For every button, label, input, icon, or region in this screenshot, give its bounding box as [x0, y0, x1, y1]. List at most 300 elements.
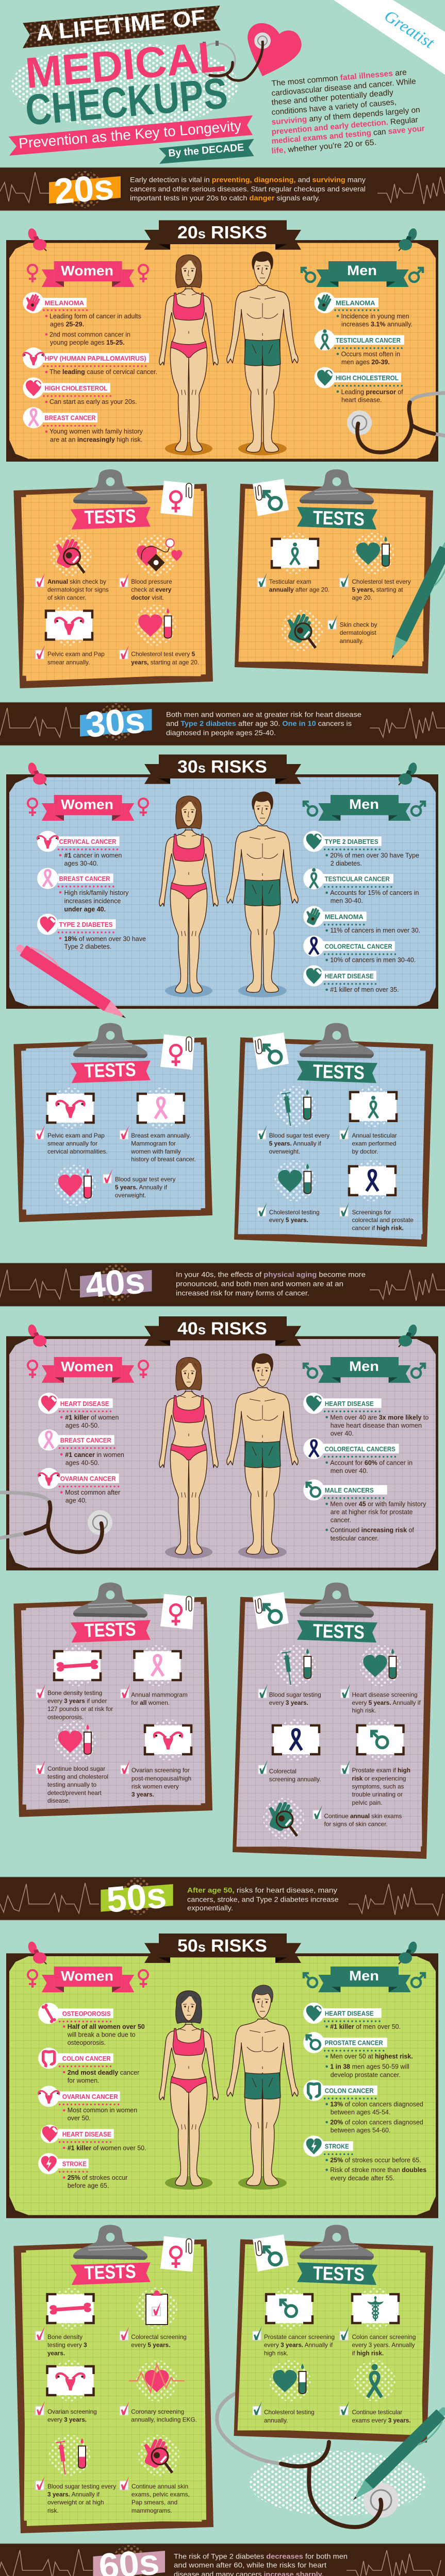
risk: men heart disease: HEART DISEASE: [325, 2009, 374, 2018]
intro paragraph: surviving any of them depends largely on: [271, 106, 420, 127]
risk: women osteoporosis: osteoporosis.: [68, 2039, 106, 2046]
ribbon: women: Women: [61, 1969, 113, 1984]
test: skin exams: for signs of skin cancer.: [324, 1821, 388, 1828]
risk: men testicular cancer: men 30-40.: [331, 897, 363, 905]
risk: women high cholesterol: Can start as early as your 20s.: [50, 398, 137, 405]
risk: men heart disease: HEART DISEASE: [325, 972, 374, 980]
risk: men stroke: Risk of stroke more than doubles: [330, 2166, 426, 2174]
risk: women breast cancer: BREAST CANCER: [44, 414, 96, 422]
test: mammogram: Annual mammogram: [131, 1691, 188, 1699]
tests heading: TESTS: [312, 1061, 365, 1083]
test: colorectal screening: [258, 1719, 321, 1783]
risk: men prostate cancer: Men over 50 at highest risk.: [330, 2053, 413, 2060]
risk: women ovarian cancer: Most common in women: [68, 2107, 137, 2114]
ribbon: men: Men: [349, 1968, 379, 1984]
tests heading: [253, 1023, 377, 1083]
badge: 20s: 20s: [53, 166, 116, 212]
risk: men heart disease: [303, 2003, 401, 2030]
risk: women osteoporosis: Half of all women over 50: [68, 2023, 145, 2030]
ribbon: women: Women: [61, 263, 113, 279]
test: colon screening: [340, 2288, 416, 2357]
risk: men colorectal cancer: COLORECTAL CANCER: [325, 942, 392, 950]
corner ribbon: Greatist logo: [334, 0, 445, 75]
ribbon: prevention as the key to longevity: Prevention as the Key to Longevity: [18, 117, 242, 151]
test: bone density: osteoporosis.: [47, 1714, 84, 1721]
figures: woman and man: [159, 1985, 298, 2190]
tests heading: TESTS: [84, 1618, 136, 1641]
intro paragraph: [271, 68, 425, 156]
risk: men heart disease: HEART DISEASE: [325, 1400, 374, 1408]
risk: men stroke: every decade after 55.: [331, 2175, 394, 2182]
risk: men type 2 diabetes: TYPE 2 DIABETES: [325, 838, 378, 845]
risk: women type 2 diabetes: TYPE 2 DIABETES: [59, 921, 113, 928]
test: cholesterol: every 5 years.: [269, 1216, 308, 1224]
title: medical checkups: CHECKUPS: [23, 69, 229, 134]
test: blood sugar: [258, 1645, 321, 1706]
intro text: [166, 710, 361, 737]
panel: 40s risks: [0, 1316, 438, 1570]
intro text: [176, 1270, 366, 1297]
test: blood sugar: every 3 years.: [269, 1699, 308, 1706]
risk: men colon cancer: 13% of colon cancers diagnosed: [330, 2101, 423, 2108]
ribbon: by the decade: By the DECADE: [168, 142, 244, 159]
test: blood sugar: Blood sugar testing: [269, 1691, 321, 1699]
figures: woman and man: [159, 1354, 298, 1559]
risk: men male cancers: are at higher risk for prostate: [331, 1509, 413, 1516]
risk: women osteoporosis: will break a bone due to: [67, 2031, 136, 2039]
risk: women colon cancer: [38, 2047, 139, 2084]
test: heart disease screening: [341, 1645, 421, 1714]
intro text: [130, 176, 366, 202]
test: annual exams: Continue annual skin: [131, 2483, 188, 2490]
risk: women type 2 diabetes: [37, 914, 146, 951]
risk: women type 2 diabetes: 18% of women over 30 have: [64, 935, 146, 942]
clipboard: 50s women tests: [13, 2225, 213, 2533]
risk: men heart disease: Men over 40 are 3x more likely to: [330, 1414, 428, 1421]
risk: men colon cancer: between ages 45-54.: [331, 2109, 390, 2116]
heading ribbon: 50s risks: 50s RISKS: [177, 1936, 267, 1956]
test: colon screening: Colon cancer screening: [352, 2333, 416, 2341]
stethoscope ear tube: [210, 62, 233, 76]
risk: women heart disease: HEART DISEASE: [62, 2130, 111, 2138]
risk: women hpv: HPV (HUMAN PAPILLOMAVIRUS): [44, 354, 146, 362]
header: title and introduction: [8, 0, 445, 164]
test: annual exams: Pap smears, and: [131, 2499, 177, 2506]
intro paragraph: these and other potentially deadly: [271, 88, 394, 107]
risk: men colon cancer: between ages 54-60.: [331, 2127, 390, 2134]
panel: 20s risks: [6, 221, 445, 462]
risk: men prostate cancer: [303, 2032, 413, 2078]
intro paragraph: The most common fatal illnesses are: [271, 68, 407, 88]
badge: 30s: 30s: [84, 700, 146, 745]
test: coronary screening: annually, including EKG.: [131, 2416, 197, 2424]
band: 60s introduction: [0, 2541, 445, 2576]
green pen: [349, 2404, 445, 2506]
risk: women type 2 diabetes: Type 2 diabetes.: [64, 943, 111, 951]
stethoscope: [0, 1493, 112, 1552]
tests heading: [70, 1023, 194, 1083]
heading ribbon: 20s risks: 20s RISKS: [177, 223, 267, 242]
risk: men heart disease: [303, 1393, 428, 1437]
risk: men high cholesterol: HIGH CHOLESTEROL: [336, 374, 399, 382]
test: testicular exam: annually after age 20.: [269, 586, 329, 594]
intro paragraph: medical exams and testing can save your: [271, 124, 425, 146]
test: prostate screening: Prostate cancer screening: [264, 2333, 335, 2341]
test: skin exams: [262, 1797, 402, 1839]
panel: 50s risks: [6, 1934, 438, 2218]
test: blood sugar and cholesterol: Continue blood sugar: [47, 1765, 105, 1772]
clipboard: 30s women tests: [13, 1023, 212, 1222]
intro text: pronounced, and both men and women are at an: [176, 1279, 343, 1287]
heart with stethoscope: [198, 23, 302, 80]
test: cholesterol: [340, 533, 411, 601]
pins: [27, 1324, 418, 1347]
risk: women breast cancer: BREAST CANCER: [59, 875, 110, 883]
risk: women breast cancer: increases incidence: [64, 897, 121, 905]
risk: women heart disease: [38, 1393, 119, 1429]
tests heading: TESTS: [84, 1059, 136, 1082]
band: 30s introduction: [0, 700, 445, 745]
test: blood sugar: [55, 1165, 175, 1206]
risk: men testicular cancer: men ages 20-39.: [341, 359, 390, 366]
risk: women hpv: [23, 347, 157, 376]
risk: women breast cancer: Young women with family history: [50, 428, 143, 435]
test: blood sugar: overweight.: [269, 1148, 300, 1155]
test: blood sugar: Blood sugar testing every: [47, 2483, 116, 2490]
risk: women melanoma: 2nd most common cancer in: [50, 331, 130, 338]
risk: men high cholesterol: Leading precursor of: [341, 388, 403, 396]
risk: women high cholesterol: HIGH CHOLESTEROL: [44, 384, 108, 392]
test: prostate screening: [253, 2288, 335, 2357]
panel: 30s risks: [6, 754, 438, 1009]
badge: 50s: 50s: [105, 1875, 168, 1920]
risk: men melanoma: Incidence in young men: [341, 313, 409, 320]
test: heart disease screening: every 5 years. Annually if: [352, 1699, 421, 1706]
risk: women cervical cancer: #1 cancer in women: [64, 852, 122, 859]
test: cholesterol: age 20.: [352, 594, 372, 601]
tests heading: [70, 1583, 194, 1642]
risk: women breast cancer: are at an increasingly high risk.: [50, 436, 142, 444]
test: prostate screening: every 3 years. Annually if: [264, 2342, 333, 2349]
intro text: cancers and other serious diseases. Start regular checkups and several: [130, 184, 366, 193]
test: prostate exam: pelvic pain.: [352, 1799, 383, 1806]
risk: men melanoma: MELANOMA: [336, 299, 375, 307]
test: blood sugar: overweight or at high: [47, 2499, 104, 2506]
test: colorectal and prostate: Screenings for: [352, 1209, 391, 1216]
test: skin check: [36, 534, 109, 601]
risk: women breast cancer: [37, 868, 129, 913]
test: skin check: dermatologist: [340, 629, 376, 636]
intro paragraph: cardiovascular disease and cancer. While: [271, 77, 416, 98]
pins: [27, 761, 418, 785]
test: bone density: Bone density: [47, 2333, 83, 2341]
risk: men male cancers: [303, 1480, 426, 1542]
heading ribbon: 40s risks: [144, 1316, 301, 1346]
risk: women colon cancer: 2nd most deadly cancer: [68, 2069, 139, 2076]
test: blood pressure: Blood pressure: [131, 578, 172, 585]
test: prostate exam: [341, 1719, 410, 1806]
risk: women heart disease: ages 40-50.: [65, 1422, 100, 1429]
risk: men colorectal cancer: [303, 936, 416, 963]
test: testicular exams: exams every 3 years.: [352, 2417, 411, 2424]
risk: women ovarian cancer: Most common after: [65, 1489, 120, 1496]
test: ovarian screening: post-menopausal/high: [131, 1775, 191, 1782]
risk: men prostate cancer: 1 in 38 men ages 50-59 will: [330, 2063, 409, 2071]
risk: women breast cancer: ages 40-50.: [65, 1460, 100, 1467]
test: prostate exam: trouble urinating or: [352, 1791, 403, 1798]
test: coronary screening: [120, 2360, 197, 2424]
risk: men type 2 diabetes: [303, 831, 419, 867]
test: pelvic exam: smear annually.: [47, 659, 90, 666]
test: blood sugar and cholesterol: [36, 1721, 108, 1804]
test: testicular exam: by doctor.: [352, 1148, 378, 1155]
risk: women heart disease: [41, 2125, 146, 2151]
risk: women osteoporosis: OSTEOPOROSIS: [62, 2010, 111, 2018]
test: pelvic exam: [36, 1088, 108, 1155]
intro text: Both men and women are at greater risk for heart disease: [166, 710, 361, 718]
heading ribbon: 20s risks: [144, 221, 301, 250]
test: cholesterol: Cholesterol test every: [352, 578, 411, 585]
green pen: [386, 539, 445, 663]
test: blood sugar: risk.: [47, 2507, 59, 2514]
risk: women ovarian cancer: over 50.: [68, 2115, 91, 2122]
risk: women heart disease: #1 killer of women over 50.: [68, 2144, 146, 2151]
figures: woman and man: [159, 252, 298, 455]
test: prostate exam: symptoms, such as: [352, 1783, 404, 1790]
test: colorectal screening: every 5 years.: [131, 2342, 170, 2349]
pins: [27, 1941, 418, 1964]
risk: women melanoma: MELANOMA: [44, 299, 85, 307]
risk: men high cholesterol: heart disease.: [341, 397, 382, 404]
ribbon: men: Men: [347, 263, 377, 278]
intro text: and Type 2 diabetes after age 30. One in 10 cancers is: [166, 719, 352, 727]
intro text: diagnosed in people ages 25-40.: [166, 728, 276, 737]
corner ribbon: Greatist logo: Greatist: [381, 6, 438, 52]
intro paragraph: prevention and early detection. Regular: [271, 115, 418, 137]
intro text: cancers, stroke, and Type 2 diabetes increase: [187, 1895, 339, 1903]
intro text: [187, 1886, 339, 1912]
risk: men type 2 diabetes: 2 diabetes.: [331, 860, 362, 867]
clipboard: 40s women tests: [13, 1583, 212, 1817]
test: skin check: annually.: [340, 637, 364, 645]
test: cholesterol: [120, 605, 199, 666]
clipboard: 20s men tests: [235, 469, 445, 674]
risk: women ovarian cancer: [38, 2086, 137, 2122]
heading ribbon: 50s risks: [144, 1934, 301, 1963]
risk: men stroke: 25% of strokes occur before 65.: [330, 2157, 421, 2164]
test: pelvic exam: smear annually for: [47, 1140, 97, 1147]
tests heading: TESTS: [312, 1620, 365, 1643]
risk: men colorectal cancers: [303, 1438, 413, 1475]
ribbon: women: Women: [61, 1359, 113, 1375]
risk: men colon cancer: 20% of colon cancers diagnosed: [330, 2119, 423, 2126]
risk: women stroke: before age 65.: [68, 2182, 109, 2190]
test: ovarian screening: Ovarian screening for: [131, 1767, 190, 1774]
test: annual exams: [120, 2433, 190, 2514]
risk: women colon cancer: COLON CANCER: [62, 2055, 111, 2062]
risk: women cervical cancer: [37, 831, 122, 867]
risk: men testicular cancer: Accounts for 15% of cancers in: [330, 889, 419, 896]
risk: men colon cancer: [303, 2080, 423, 2134]
intro text: increased risk for many forms of cancer.: [176, 1289, 309, 1297]
tests heading: TESTS: [312, 507, 365, 530]
test: skin check: Skin check by: [340, 621, 377, 628]
test: testicular exams: Continue testicular: [352, 2409, 402, 2416]
risk: women breast cancer: BREAST CANCER: [60, 1436, 111, 1444]
test: breast exam: women with family: [130, 1148, 181, 1155]
intro text: Early detection is vital in preventing, diagnosing, and surviving many: [130, 176, 366, 184]
ribbon: women: [28, 1357, 148, 1383]
risk: men testicular cancer: Occurs most often in: [341, 350, 400, 358]
risk: women stroke: [38, 2153, 127, 2190]
risk: women ovarian cancer: [38, 1468, 120, 1504]
test: blood pressure: doctor visit.: [131, 594, 164, 601]
test: colorectal and prostate: [340, 1160, 414, 1231]
test: annual exams: mammograms.: [131, 2507, 172, 2514]
test: testicular exam: [340, 1086, 397, 1155]
test: pelvic exam: cervical abnormalities.: [47, 1148, 108, 1155]
risk: women breast cancer: [38, 1429, 124, 1467]
risk: women breast cancer: #1 cancer in women: [65, 1451, 124, 1459]
risk: women melanoma: ages 25-29.: [50, 320, 84, 328]
test: cholesterol: Cholesterol test every 5: [131, 651, 195, 658]
heading ribbon: 30s risks: 30s RISKS: [177, 757, 267, 777]
test: blood sugar: 5 years. Annually if: [115, 1184, 168, 1191]
stethoscope with dot cloud: [217, 2392, 426, 2527]
intro text: In your 40s, the effects of physical aging become more: [176, 1270, 366, 1279]
tests heading: [253, 469, 377, 530]
test: prostate exam: risk or experiencing: [352, 1775, 406, 1782]
badge: 40s: 40s: [84, 1260, 146, 1306]
title: medical checkups: [23, 31, 229, 134]
test: blood sugar: [36, 2435, 116, 2514]
tests heading: [70, 469, 194, 530]
risk: men male cancers: MALE CANCERS: [325, 1486, 374, 1494]
test: blood sugar: [258, 1086, 329, 1155]
test: blood sugar: Blood sugar test every: [269, 1132, 329, 1139]
test: prostate exam: Prostate exam if high: [352, 1767, 410, 1774]
test: testicular exams: [340, 2360, 411, 2424]
ribbon: women: [28, 795, 148, 821]
band: 20s introduction: [0, 166, 445, 212]
test: blood sugar: Blood sugar test every: [115, 1176, 175, 1183]
figures: woman and man: [159, 792, 298, 997]
risk: men male cancers: testicular cancer.: [331, 1535, 378, 1542]
stethoscope: [347, 393, 445, 452]
risk: women breast cancer: [23, 407, 143, 444]
test: testicular exam: exam performed: [352, 1140, 396, 1147]
test: bone density: 127 pounds or at risk for: [47, 1705, 113, 1713]
intro text: and women after 60, while the risks for heart: [174, 2561, 326, 2569]
test: cholesterol: [253, 2360, 315, 2424]
band: 50s introduction: [0, 1875, 445, 1920]
test: blood pressure: [120, 535, 182, 601]
clipboard: 40s men tests: [233, 1583, 433, 1859]
risk: women melanoma: Leading form of cancer in adults: [50, 313, 141, 320]
test: cholesterol: Cholesterol testing: [264, 2409, 315, 2416]
risk: men colorectal cancers: men over 40.: [331, 1467, 368, 1475]
risk: women ovarian cancer: age 40.: [65, 1497, 87, 1504]
risk: women breast cancer: under age 40.: [64, 906, 106, 913]
test: bone density: Bone density testing: [47, 1689, 102, 1697]
risk: men male cancers: Continued increasing risk of: [330, 1527, 414, 1534]
risk: women stroke: 25% of strokes occur: [68, 2174, 127, 2181]
test: skin check: of skin cancer.: [47, 594, 86, 601]
risk: women heart disease: #1 killer of women: [65, 1414, 119, 1421]
test: blood sugar and cholesterol: testing annually to: [47, 1781, 97, 1788]
dot cloud behind title: [11, 43, 238, 127]
risk: men colon cancer: COLON CANCER: [325, 2087, 374, 2095]
risk: men heart disease: have heart disease than women: [331, 1422, 422, 1429]
risk: women stroke: STROKE: [62, 2160, 87, 2168]
test: testicular exam: Annual testicular: [352, 1132, 397, 1139]
test: breast exam: Breast exam annually.: [131, 1132, 191, 1139]
ribbon: men: Men: [349, 1359, 379, 1374]
test: blood sugar: 5 years. Annually if: [269, 1140, 322, 1147]
test: testicular exam: [258, 533, 329, 594]
tests heading: TESTS: [84, 505, 136, 528]
risk: men testicular cancer: TESTICULAR CANCER: [325, 875, 390, 883]
intro paragraph: life, whether you're 20 or 65.: [271, 138, 377, 156]
risk: men heart disease: over 40.: [331, 1430, 354, 1437]
risk: women colon cancer: for women.: [68, 2077, 100, 2084]
risk: men heart disease: [303, 965, 399, 993]
ribbon: men: [302, 261, 423, 287]
test: mammogram: for all women.: [131, 1699, 170, 1706]
risk: men testicular cancer: TESTICULAR CANCER: [336, 336, 401, 344]
intro paragraph: conditions have a variety of causes,: [271, 98, 397, 117]
test: pelvic exam: [36, 605, 105, 666]
risk: men melanoma: MELANOMA: [325, 913, 364, 921]
risk: women heart disease: HEART DISEASE: [60, 1400, 109, 1408]
heading ribbon: 30s risks: [144, 754, 301, 784]
clipboard: 20s women tests: [13, 469, 213, 688]
test: cholesterol: years, starting at age 20.: [131, 659, 199, 666]
test: breast exam: [120, 1088, 196, 1163]
ribbon: men: [304, 1357, 425, 1383]
ribbon: men: Men: [349, 796, 379, 812]
intro text: The risk of Type 2 diabetes decreases for both men: [174, 2552, 348, 2560]
test: testicular exam: Testicular exam: [269, 578, 311, 585]
risk: women high cholesterol: [23, 377, 137, 405]
risk: women melanoma: young people ages 15-25.: [50, 339, 125, 346]
risk: women osteoporosis: [38, 2003, 145, 2046]
test: ovarian screening: 3 years.: [131, 1791, 154, 1798]
test: ovarian screening: every 3 years.: [47, 2416, 87, 2424]
test: skin check: [281, 608, 377, 651]
ribbon: women: [28, 261, 148, 287]
risk: women ovarian cancer: OVARIAN CANCER: [60, 1475, 116, 1483]
test: coronary screening: Coronary screening: [131, 2408, 184, 2415]
test: ovarian screening: [121, 1719, 191, 1798]
risk: men testicular cancer: [315, 329, 405, 366]
test: skin check: Annual skin check by: [47, 578, 106, 585]
risk: men testicular cancer: [303, 868, 419, 905]
test: heart disease screening: high risk.: [352, 1707, 376, 1714]
test: bone density: every 3 years if under: [47, 1698, 107, 1705]
clipboard: 30s men tests: [234, 1023, 433, 1247]
ribbon: women: Women: [61, 797, 113, 812]
test: cholesterol: Cholesterol testing: [269, 1209, 320, 1216]
risk: men melanoma: [314, 291, 413, 328]
risk: women hpv: The leading cause of cervical cancer.: [50, 368, 157, 376]
clipboard: 50s men tests: [234, 2225, 433, 2443]
intro text: exponentially.: [187, 1904, 233, 1912]
ribbon: men: [304, 795, 425, 821]
test: colorectal screening: [120, 2287, 187, 2349]
tests heading: TESTS: [312, 2262, 365, 2285]
test: blood sugar: overweight.: [115, 1192, 146, 1199]
